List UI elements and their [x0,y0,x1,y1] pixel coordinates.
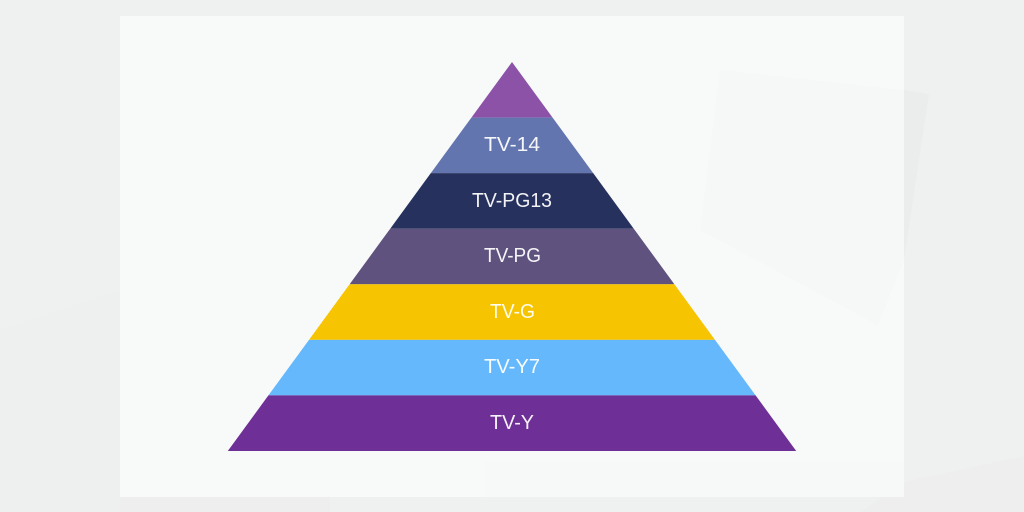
pyramid chart [228,62,796,451]
pyramid tier: TV-PG13: TV-PG13 [472,190,552,212]
pyramid tier: TV-Y [228,395,796,451]
pyramid tier: TV-PG13 [390,173,634,229]
pyramid tier: TV-PG: TV-PG [484,245,541,267]
pyramid tier: TV-Y7 [268,340,756,395]
pyramid tier: TV-14: TV-14 [484,134,540,156]
pyramid tier: top unlabeled [471,62,553,118]
pyramid tier: TV-Y7: TV-Y7 [484,356,540,378]
panel: white background card [120,16,904,497]
pyramid tier: TV-G [309,284,715,340]
pyramid tier: TV-PG [350,229,674,284]
pyramid tier: TV-Y: TV-Y [490,412,534,434]
pyramid tier: TV-14 [431,118,593,173]
pyramid tier: TV-G: TV-G [490,301,535,323]
